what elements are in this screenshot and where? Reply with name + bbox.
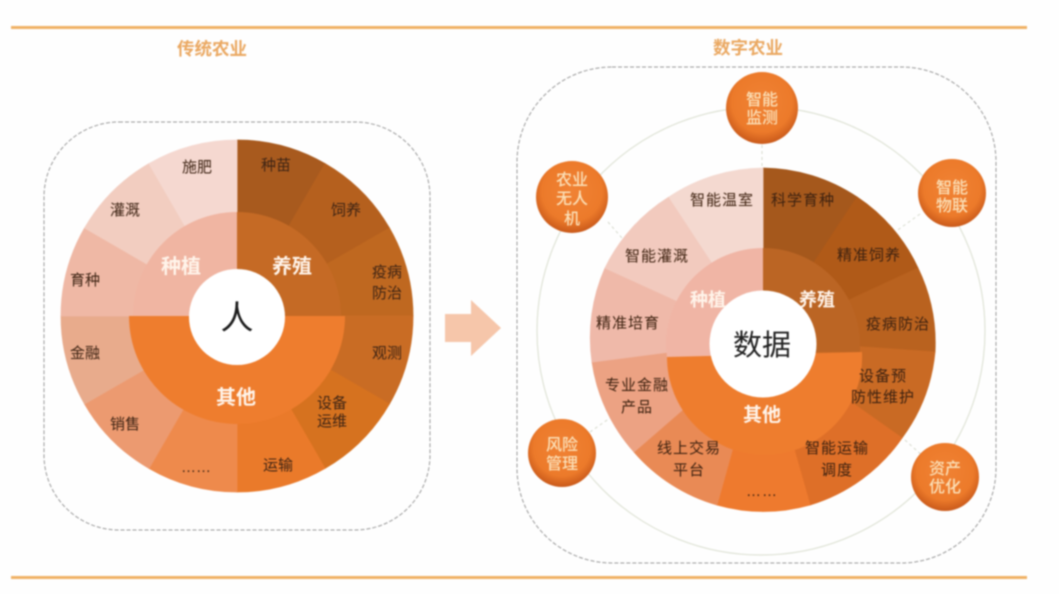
segment labels: 种植 — [690, 289, 726, 310]
wedge labels: 销售 — [110, 416, 140, 433]
node: smart IoT: 智能 — [936, 179, 968, 197]
wedge labels — [596, 191, 930, 500]
top rule — [11, 26, 1027, 29]
wedge labels: 疫病防治 — [866, 316, 930, 333]
heading: traditional agriculture: 传统农业 — [177, 39, 247, 59]
node: asset optimisation — [911, 443, 979, 511]
heading: digital agriculture: 数字农业 — [713, 38, 783, 58]
inner segment: other — [129, 316, 345, 424]
node: agricultural drone — [536, 161, 608, 233]
wedge labels: 育种 — [70, 272, 100, 289]
wedge labels: 种苗 — [261, 157, 291, 174]
wedge labels: 饲养 — [331, 202, 361, 219]
node: smart IoT: 物联 — [936, 197, 968, 215]
wedge labels: 设备 — [317, 395, 347, 412]
wedge labels: 精准培育 — [596, 315, 660, 332]
outer ring wedges — [590, 168, 935, 511]
inner segment: other — [667, 352, 862, 455]
hub label: 数据 — [733, 329, 791, 362]
wedge labels: 运维 — [317, 413, 347, 430]
hub — [189, 269, 285, 365]
wedge labels: 智能温室 — [690, 191, 754, 209]
segment labels: 养殖 — [799, 289, 835, 310]
wedge labels: 观测 — [372, 345, 402, 362]
wedge labels: 线上交易 — [657, 439, 721, 457]
node: risk management: 风险 — [546, 436, 578, 454]
wedge labels — [70, 157, 402, 476]
connectors — [590, 145, 925, 458]
wedge labels: 平台 — [673, 462, 705, 479]
wedge labels: 专业金融 — [605, 377, 669, 394]
wedge labels: 金融 — [70, 345, 100, 362]
node: agricultural drone: 机 — [564, 210, 580, 228]
orbit ring — [537, 107, 985, 555]
wedge labels: 运输 — [263, 457, 293, 474]
node: asset optimisation: 资产 — [929, 460, 961, 478]
wedge labels: 防性维护 — [851, 389, 915, 406]
chart: digital agriculture wheel — [590, 168, 935, 511]
wedge labels: 智能灌溉 — [625, 247, 689, 265]
wedge labels: 产品 — [621, 399, 653, 416]
node: asset optimisation: 优化 — [929, 478, 961, 496]
segment labels — [161, 254, 312, 409]
node: agricultural drone: 无人 — [556, 190, 588, 208]
node: risk management — [528, 419, 596, 487]
wedge labels: …… — [181, 459, 211, 476]
wedge labels: 科学育种 — [771, 192, 835, 209]
wedge labels: 调度 — [821, 462, 853, 479]
node: risk management: 管理 — [546, 454, 578, 473]
segment labels: 其他 — [216, 386, 256, 409]
node: smart monitoring: 智能 — [746, 91, 778, 109]
wedge labels: 精准饲养 — [837, 247, 901, 264]
arrow — [445, 300, 501, 356]
wedge labels: 防治 — [372, 285, 402, 302]
outer ring wedges — [61, 140, 413, 492]
panel: traditional agriculture frame — [44, 122, 430, 530]
segment labels: 其他 — [743, 404, 781, 426]
inner segment: planting — [666, 248, 763, 357]
segment labels: 种植 — [161, 254, 201, 278]
panel: digital agriculture frame — [517, 67, 996, 563]
hub label: 人 — [220, 299, 254, 336]
segment labels — [690, 289, 835, 426]
node: smart monitoring: 监测 — [746, 109, 778, 127]
wedge labels: 智能运输 — [805, 439, 869, 457]
inner segment: planting — [133, 212, 237, 316]
hub — [710, 290, 816, 398]
chart: traditional agriculture wheel — [61, 140, 413, 492]
wedge labels: 疫病 — [372, 264, 402, 281]
node: agricultural drone: 农业 — [556, 171, 588, 189]
inner segment: breeding — [237, 212, 341, 316]
segment labels: 养殖 — [272, 254, 312, 278]
wedge labels: …… — [746, 483, 778, 500]
wedge labels: 灌溉 — [110, 202, 140, 219]
wedge labels: 设备预 — [859, 368, 907, 385]
bottom rule — [11, 576, 1027, 579]
inner segment: breeding — [763, 248, 860, 352]
node: smart IoT — [918, 159, 986, 227]
wedge labels: 施肥 — [182, 159, 212, 176]
node: smart monitoring — [726, 72, 798, 144]
